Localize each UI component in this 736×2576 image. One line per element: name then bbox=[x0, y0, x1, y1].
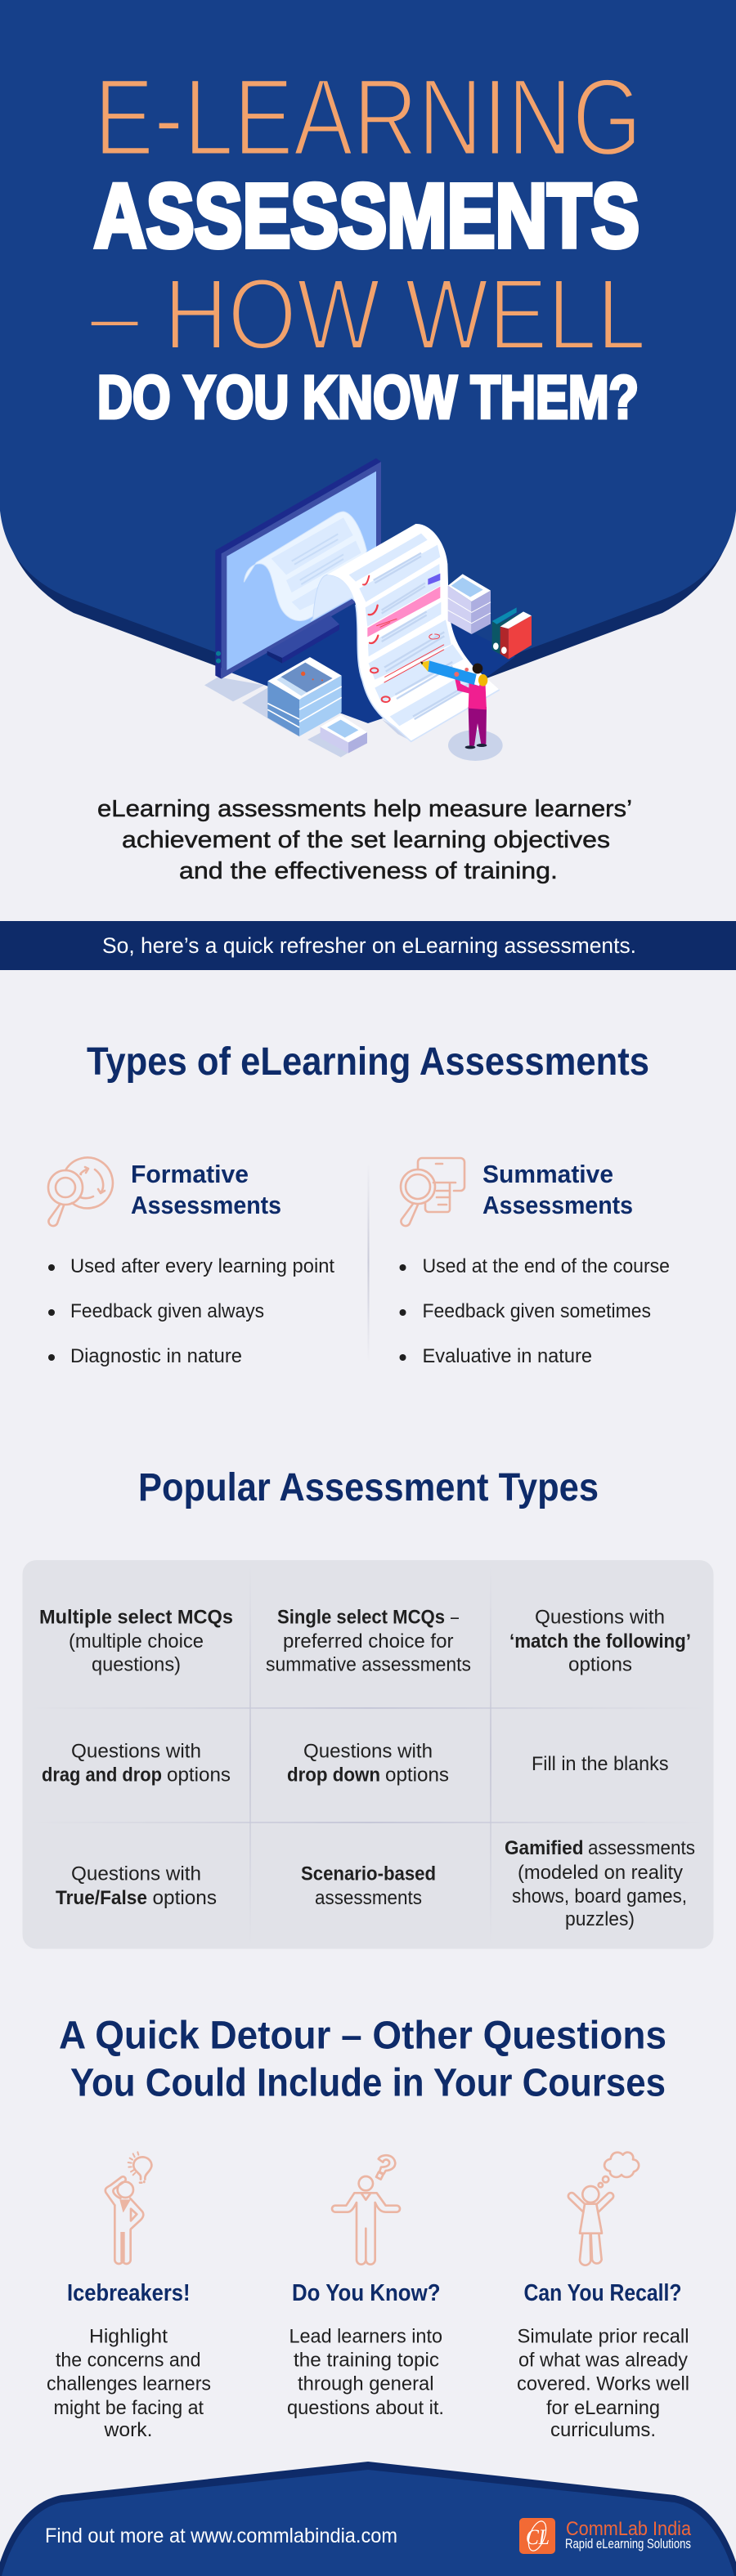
list: summative bbox=[399, 1255, 670, 1367]
header background bbox=[0, 0, 736, 722]
cell: gamified: Gamified bbox=[505, 1837, 584, 1859]
logo: CommLab India: Rapid eLearning Solutions bbox=[565, 2536, 691, 2551]
column: can you recall: curriculums. bbox=[550, 2419, 656, 2441]
cell: drag and drop: Questions with bbox=[71, 1741, 201, 1762]
title bbox=[90, 57, 646, 432]
heading: quick detour: A Quick Detour – Other Questions bbox=[59, 2014, 666, 2058]
cell: gamified: puzzles) bbox=[565, 1908, 635, 1930]
cell: multiple select: questions) bbox=[92, 1654, 181, 1675]
cell: drag and drop: options bbox=[167, 1764, 231, 1787]
icon: thinking man with light bulb bbox=[105, 2152, 151, 2264]
floor shadows bbox=[204, 677, 411, 758]
printed answer sheet bbox=[311, 524, 500, 741]
cell: scenario-based: Scenario-based bbox=[301, 1863, 436, 1885]
list: formative: Feedback given always bbox=[70, 1300, 264, 1322]
heading: summative: Summative bbox=[482, 1160, 613, 1188]
logo: CommLab India: CommLab India bbox=[566, 2518, 692, 2540]
footer link: Find out more at www.commlabindia.com bbox=[45, 2525, 397, 2547]
column: do you know: questions about it. bbox=[287, 2397, 444, 2419]
list: formative: Used after every learning point bbox=[70, 1255, 334, 1277]
cell: match the following: options bbox=[568, 1654, 632, 1675]
heading: popular types: Popular Assessment Types bbox=[138, 1466, 599, 1509]
list: summative: Evaluative in nature bbox=[422, 1345, 592, 1367]
cell: multiple select: (multiple choice bbox=[69, 1630, 204, 1652]
column: can you recall: covered. Works well bbox=[517, 2373, 689, 2395]
cell: match the following bbox=[509, 1607, 691, 1675]
column: do you know: through general bbox=[298, 2373, 433, 2395]
column: do you know bbox=[287, 2280, 444, 2419]
column: icebreakers bbox=[47, 2280, 211, 2441]
paper stack, right bbox=[448, 574, 491, 634]
footer band bbox=[0, 2462, 736, 2576]
logo: CommLab India bbox=[519, 2518, 692, 2554]
refresher banner: So, here’s a quick refresher on eLearning assessments. bbox=[102, 933, 636, 958]
cell: true/false: Questions with bbox=[71, 1863, 201, 1885]
list: formative: Diagnostic in nature bbox=[70, 1345, 242, 1367]
heading: formative bbox=[131, 1160, 281, 1219]
cell: single select bbox=[266, 1607, 471, 1675]
cell: match the following: ‘match the following’ bbox=[509, 1630, 691, 1652]
cell: gamified bbox=[505, 1837, 695, 1930]
cell: drag and drop: drag and drop bbox=[42, 1764, 162, 1787]
cell: single select: summative assessments bbox=[266, 1654, 471, 1675]
illustration: monitor, exam paper and learner bbox=[204, 458, 532, 761]
icon: magnifier over document bbox=[401, 1158, 464, 1226]
cell: drop down: drop down bbox=[287, 1764, 380, 1787]
cell: single select: Single select MCQs bbox=[277, 1607, 445, 1628]
list: summative: Used at the end of the course bbox=[422, 1255, 670, 1277]
column: icebreakers: the concerns and bbox=[56, 2349, 201, 2372]
cell: drop down bbox=[287, 1741, 449, 1787]
intro text: eLearning assessments help measure learners’ bbox=[97, 796, 632, 822]
cell: gamified: assessments bbox=[588, 1837, 695, 1859]
cell: drop down: Questions with bbox=[303, 1741, 433, 1762]
cell: scenario-based: assessments bbox=[315, 1887, 422, 1909]
icon: girl with thought cloud bbox=[568, 2153, 639, 2265]
cell: multiple select bbox=[39, 1607, 233, 1675]
intro text bbox=[97, 796, 632, 884]
cell: true/false bbox=[56, 1863, 217, 1909]
heading: types: Types of eLearning Assessments bbox=[87, 1040, 649, 1084]
column: can you recall: for eLearning bbox=[546, 2397, 660, 2419]
column: icebreakers: Highlight bbox=[89, 2326, 168, 2347]
heading: summative bbox=[482, 1160, 633, 1219]
heading: quick detour: You Could Include in Your Courses bbox=[70, 2061, 666, 2105]
cell: true/false: True/False bbox=[56, 1887, 147, 1909]
paper stack, left bbox=[267, 657, 342, 736]
cell: drag and drop bbox=[42, 1741, 231, 1787]
column: do you know: Do You Know? bbox=[292, 2280, 440, 2306]
cell: gamified: shows, board games, bbox=[512, 1885, 687, 1907]
cell: single select: – bbox=[451, 1607, 459, 1628]
icon: shrugging man with question mark bbox=[332, 2155, 400, 2265]
cell: scenario-based bbox=[301, 1863, 436, 1909]
column: do you know: Lead learners into bbox=[289, 2326, 442, 2347]
cell: gamified: (modeled on reality bbox=[518, 1862, 683, 1884]
cell: multiple select: Multiple select MCQs bbox=[39, 1607, 233, 1628]
learner with giant pencil bbox=[420, 660, 503, 761]
intro text: achievement of the set learning objectives bbox=[122, 827, 610, 853]
cell: drop down: options bbox=[385, 1764, 449, 1787]
binders bbox=[492, 607, 532, 660]
title: – HOW WELL bbox=[90, 258, 646, 371]
heading: formative: Formative bbox=[131, 1160, 249, 1188]
column: can you recall bbox=[517, 2280, 689, 2441]
heading: formative: Assessments bbox=[131, 1191, 281, 1219]
cell: fill in the blanks: Fill in the blanks bbox=[532, 1753, 669, 1775]
column: icebreakers: challenges learners bbox=[47, 2373, 211, 2395]
column: can you recall: Simulate prior recall bbox=[517, 2326, 689, 2347]
logo: CommLab India: CL bbox=[526, 2525, 550, 2549]
refresher banner bbox=[0, 921, 736, 970]
cell: match the following: Questions with bbox=[535, 1607, 665, 1628]
column: can you recall: Can You Recall? bbox=[523, 2280, 682, 2306]
icon: magnifier with cycle arrows bbox=[48, 1157, 113, 1226]
panel: assessment types grid bbox=[23, 1560, 713, 1948]
monitor bbox=[215, 458, 381, 679]
floor platform bbox=[231, 597, 515, 723]
column: icebreakers: Icebreakers! bbox=[67, 2280, 190, 2306]
column divider bbox=[368, 1163, 370, 1362]
cell: single select: preferred choice for bbox=[283, 1630, 453, 1652]
list: summative: Feedback given sometimes bbox=[422, 1300, 651, 1322]
column: icebreakers: might be facing at bbox=[54, 2397, 204, 2419]
paper on screen bbox=[244, 512, 366, 620]
cell: true/false: options bbox=[152, 1887, 217, 1909]
list: formative bbox=[48, 1255, 334, 1367]
column: icebreakers: work. bbox=[103, 2419, 152, 2441]
intro text: and the effectiveness of training. bbox=[179, 858, 558, 884]
paper stack, small bbox=[321, 715, 367, 754]
column: do you know: the training topic bbox=[294, 2349, 439, 2372]
column: can you recall: of what was already bbox=[518, 2349, 688, 2372]
heading: quick detour bbox=[59, 2014, 666, 2105]
heading: summative: Assessments bbox=[482, 1191, 633, 1219]
